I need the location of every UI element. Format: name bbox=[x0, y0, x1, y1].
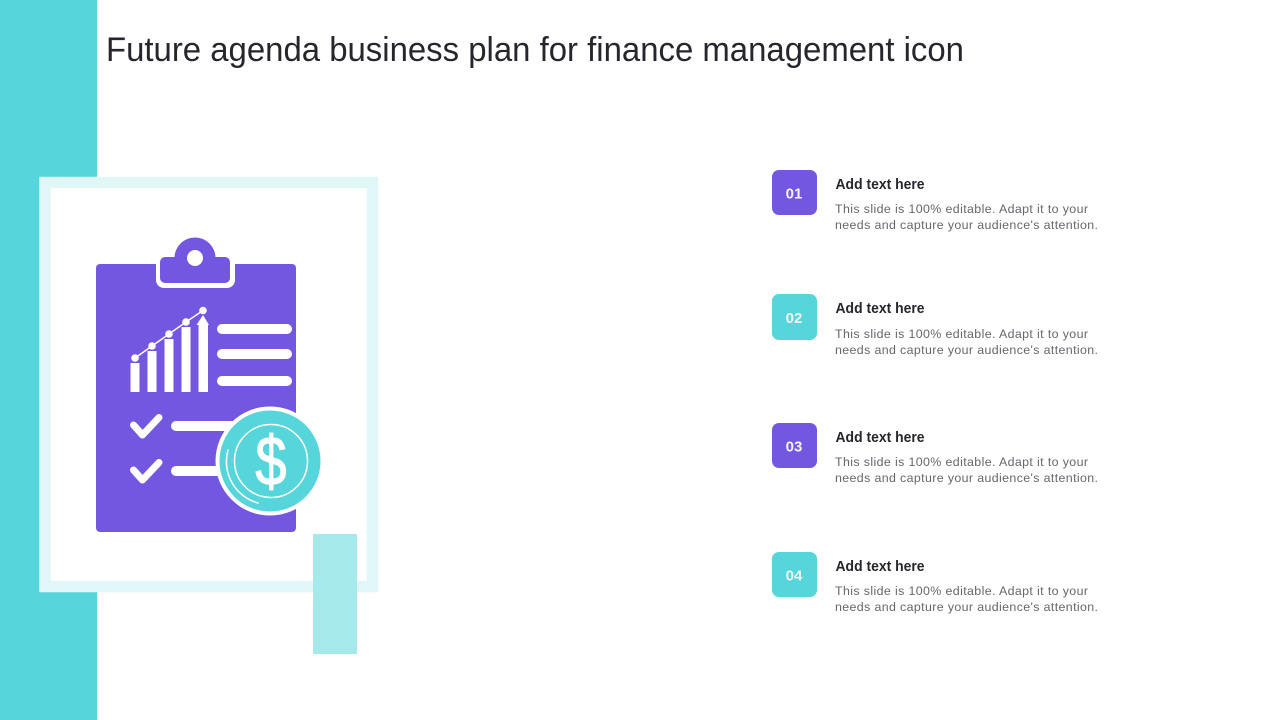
heading 04: Add text here bbox=[836, 559, 924, 575]
agenda item 01 bbox=[772, 170, 1098, 232]
image frame bbox=[45, 182, 372, 586]
heading 01: Add text here bbox=[836, 177, 924, 193]
number badge 02 bbox=[772, 294, 817, 340]
body text 03: needs and capture your audience's attention. bbox=[835, 471, 1098, 485]
body text 01: This slide is 100% editable. Adapt it to your bbox=[835, 202, 1088, 216]
teal accent rectangle bbox=[313, 534, 357, 654]
title: Future agenda business plan for finance management icon bbox=[106, 31, 964, 69]
dollar coin bbox=[216, 406, 324, 516]
heading 02: Add text here bbox=[836, 301, 924, 317]
check marks bbox=[134, 418, 159, 480]
body text 01: needs and capture your audience's attention. bbox=[835, 218, 1098, 232]
number badge 04 bbox=[772, 552, 817, 597]
dollar coin: $ bbox=[255, 423, 287, 500]
body text 01 bbox=[835, 202, 1098, 232]
teal sidebar bbox=[0, 0, 97, 720]
agenda item 04 bbox=[772, 552, 1098, 614]
body text 04: needs and capture your audience's attention. bbox=[835, 600, 1098, 614]
body text 04 bbox=[835, 584, 1098, 614]
clipboard board bbox=[96, 264, 296, 532]
body text 02 bbox=[835, 327, 1098, 357]
number badge 01: 01 bbox=[786, 186, 802, 202]
icon: finance clipboard bbox=[96, 238, 324, 532]
heading 03: Add text here bbox=[836, 430, 924, 446]
number badge 04: 04 bbox=[786, 568, 803, 584]
number badge 02: 02 bbox=[786, 310, 802, 327]
text lines bbox=[171, 324, 292, 476]
bar chart with trend line bbox=[130, 307, 209, 392]
agenda item 03 bbox=[772, 423, 1098, 485]
number badge 03: 03 bbox=[786, 438, 802, 456]
body text 02: needs and capture your audience's attention. bbox=[835, 343, 1098, 357]
number badge 03 bbox=[772, 423, 817, 468]
clipboard clip bbox=[156, 238, 235, 288]
agenda item 02 bbox=[772, 294, 1098, 357]
body text 02: This slide is 100% editable. Adapt it to your bbox=[835, 327, 1088, 341]
body text 03 bbox=[835, 455, 1098, 485]
body text 03: This slide is 100% editable. Adapt it to your bbox=[835, 455, 1088, 469]
body text 04: This slide is 100% editable. Adapt it to your bbox=[835, 584, 1088, 598]
number badge 01 bbox=[772, 170, 817, 215]
